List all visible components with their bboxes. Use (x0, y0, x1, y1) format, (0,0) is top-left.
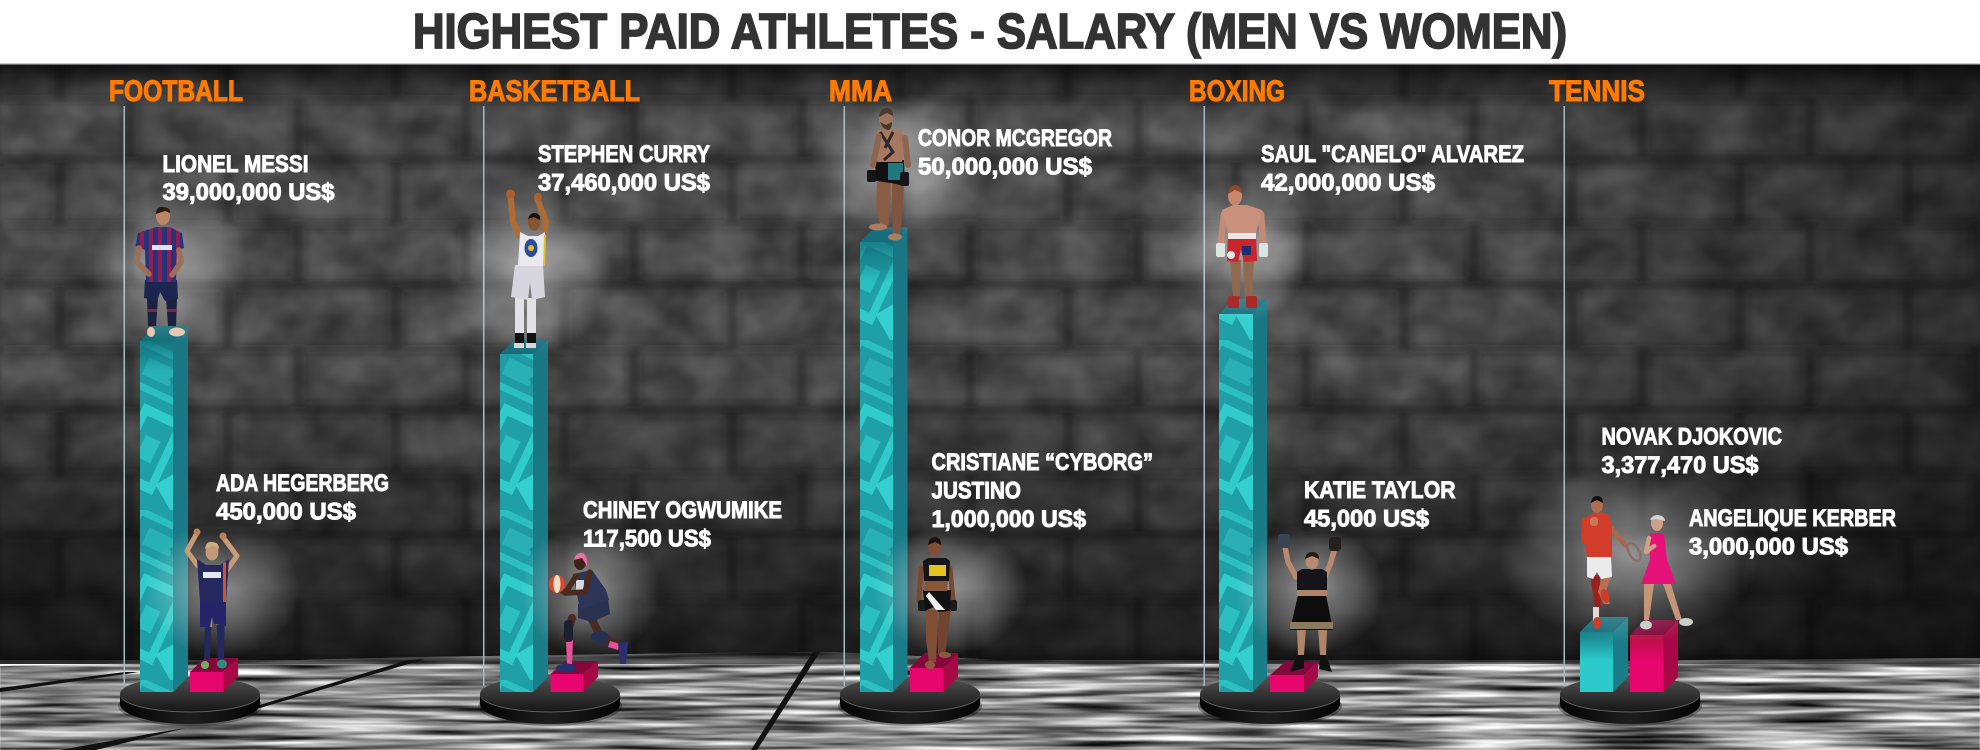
athlete: Lionel Messi (136, 207, 185, 337)
athlete: Angelique Kerber (1640, 515, 1693, 630)
label: Saul Alvarez: SAUL "CANELO" ALVAREZ (1261, 141, 1524, 168)
category label: mma: MMA (829, 75, 892, 108)
label: Lionel Messi: 39,000,000 US$ (162, 179, 335, 206)
label: Cristiane Justino (932, 449, 1153, 533)
label: Katie Taylor (1304, 477, 1456, 532)
bar: Chiney Ogwumike (550, 661, 598, 692)
label: Saul Alvarez: 42,000,000 US$ (1261, 170, 1435, 196)
podium disc: basketball (478, 676, 622, 726)
athlete: Novak Djokovic (1584, 496, 1643, 629)
bar: Cristiane Justino (910, 653, 958, 692)
athlete: Stephen Curry (506, 190, 546, 348)
label: Stephen Curry: 37,460,000 US$ (538, 170, 710, 196)
bar: Angelique Kerber (1630, 620, 1678, 692)
label: Ada Hegerberg (216, 470, 389, 526)
athlete: Saul Alvarez (1216, 185, 1268, 308)
bar: Katie Taylor (1270, 662, 1318, 692)
label: Novak Djokovic: 3,377,470 US$ (1602, 452, 1759, 479)
bar: Saul Alvarez (1219, 299, 1267, 692)
label: Chiney Ogwumike (583, 497, 782, 552)
category label: boxing: BOXING (1189, 75, 1285, 108)
label: Conor McGregor: CONOR MCGREGOR (918, 125, 1112, 152)
label: Chiney Ogwumike: CHINEY OGWUMIKE (583, 497, 782, 524)
label: Stephen Curry: STEPHEN CURRY (538, 141, 710, 168)
label: Conor McGregor (918, 125, 1112, 180)
bar: Lionel Messi (140, 326, 188, 692)
bar: Conor McGregor (860, 227, 908, 692)
athlete: Chiney Ogwumike (549, 553, 628, 672)
category label: basketball: BASKETBALL (469, 75, 640, 108)
label: Cristiane Justino: JUSTINO (932, 478, 1021, 504)
podium disc: tennis (1558, 676, 1702, 726)
background: wooden floor (0, 650, 1980, 750)
bar: Novak Djokovic (1580, 617, 1628, 692)
label: Angelique Kerber: ANGELIQUE KERBER (1689, 505, 1896, 532)
label: Conor McGregor: 50,000,000 US$ (918, 154, 1092, 180)
category label: tennis: TENNIS (1549, 75, 1645, 108)
category label: football: FOOTBALL (109, 75, 243, 108)
label: Lionel Messi (162, 151, 335, 206)
label: Stephen Curry (538, 141, 710, 196)
label: Novak Djokovic: NOVAK DJOKOVIC (1602, 424, 1782, 450)
label: Cristiane Justino: 1,000,000 US$ (932, 506, 1086, 533)
athlete: Cristiane Justino (918, 537, 957, 669)
label: Cristiane Justino: CRISTIANE “CYBORG” (932, 449, 1153, 476)
label: Saul Alvarez (1261, 141, 1524, 196)
label: Katie Taylor: KATIE TAYLOR (1304, 477, 1456, 504)
athlete: Conor McGregor (867, 108, 909, 240)
podium disc: football (118, 676, 262, 726)
background: brick wall (0, 64, 1980, 664)
spotlights behind athletes (92, 95, 1760, 658)
podium disc: boxing (1198, 676, 1342, 726)
athlete: Ada Hegerberg (187, 528, 237, 669)
label: Ada Hegerberg: ADA HEGERBERG (216, 470, 389, 497)
bar: Ada Hegerberg (190, 658, 238, 692)
header band (0, 0, 1980, 64)
label: Ada Hegerberg: 450,000 US$ (216, 498, 356, 526)
label: Angelique Kerber: 3,000,000 US$ (1689, 534, 1848, 560)
bar: Stephen Curry (500, 340, 548, 692)
axis lines (124, 106, 1565, 686)
athlete: Katie Taylor (1278, 534, 1341, 672)
label: Novak Djokovic (1602, 424, 1782, 479)
podium disc: mma (838, 676, 982, 726)
label: Angelique Kerber (1689, 505, 1896, 560)
label: Katie Taylor: 45,000 US$ (1304, 506, 1429, 532)
label: Chiney Ogwumike: 117,500 US$ (583, 526, 711, 552)
label: Lionel Messi: LIONEL MESSI (162, 151, 308, 178)
title: HIGHEST PAID ATHLETES - SALARY (MEN VS WOMEN) (413, 5, 1567, 59)
